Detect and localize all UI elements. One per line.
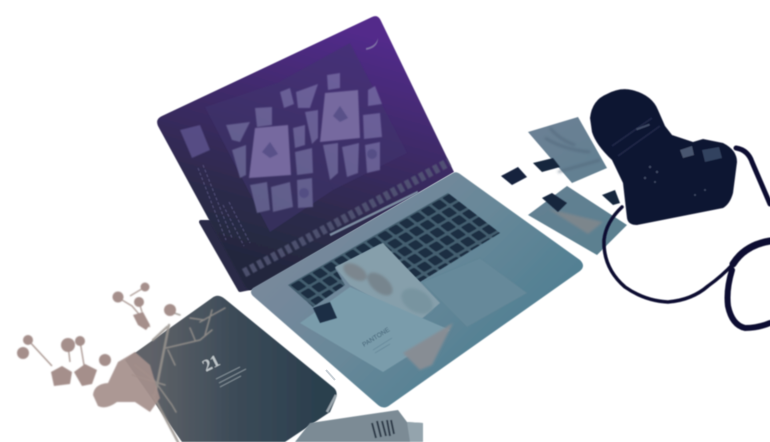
keyboard: [288, 193, 500, 307]
photo print: top: [528, 117, 607, 183]
trackpad: [422, 258, 527, 327]
pantone card: [300, 287, 450, 372]
sd card on laptop: [313, 302, 337, 323]
petals: [340, 259, 437, 319]
memory card 2: [533, 158, 560, 172]
bottom package: [295, 410, 423, 442]
screen: top right logo: [366, 38, 378, 50]
notebook title: 21: [199, 351, 223, 376]
camera buttons: [636, 124, 706, 196]
laptop: [157, 16, 583, 407]
screen: artboards: [205, 43, 407, 232]
screen: mockup details: [262, 106, 377, 198]
notebook: [125, 296, 337, 442]
photo print: bottom: [528, 186, 627, 255]
lens ring: [612, 118, 660, 156]
barcode: [372, 420, 394, 438]
photo cards and memory cards: [501, 117, 627, 255]
memory card 4: [602, 190, 620, 205]
screen: film strip: [244, 162, 449, 273]
paper with petals: [335, 243, 440, 323]
camera body and lens: [590, 89, 737, 225]
laptop screen: [157, 16, 454, 290]
laptop side port: [326, 370, 335, 380]
flower thin stems: [28, 287, 150, 366]
memory card 1: [501, 167, 527, 185]
camera strap: [604, 148, 770, 328]
flower stems: [132, 308, 225, 442]
notebook caption lines: [216, 367, 246, 387]
petal: [403, 323, 453, 370]
screen: left sidebar thumbnails: [180, 125, 210, 158]
screen: mockup items: [226, 73, 382, 213]
screen: layers list: [198, 165, 250, 246]
pantone label: PANTONE: [361, 326, 392, 349]
camera top screen: [702, 147, 722, 162]
notebook spine: [327, 395, 336, 412]
laptop stand: [201, 222, 250, 290]
laptop base: [251, 172, 583, 408]
camera: [590, 89, 770, 328]
memory card 3: [542, 193, 567, 212]
dried flower: [17, 282, 225, 442]
flower heads: [17, 282, 176, 412]
camera dial: [680, 146, 694, 158]
